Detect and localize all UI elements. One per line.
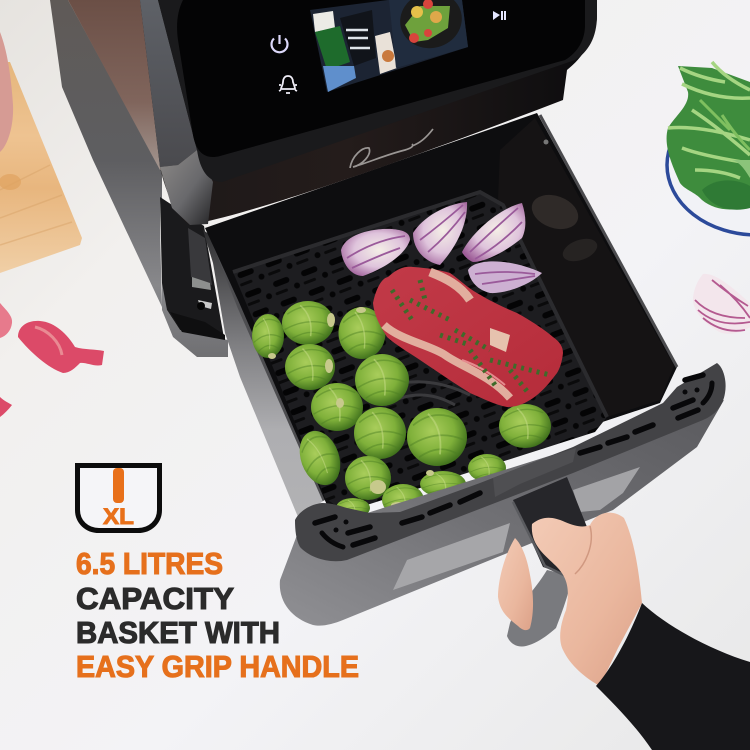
icon: power: [272, 35, 288, 52]
hand gripping the handle: [498, 513, 642, 686]
brussels sprouts: [252, 301, 551, 518]
air fryer side facet: [50, 0, 228, 357]
touch panel: [177, 0, 585, 157]
icon: XL basket capacity: [78, 466, 160, 530]
plate with green leaves: [667, 62, 750, 235]
sleeve: [596, 603, 750, 750]
touch panel frame: [158, 0, 597, 182]
basket right inner wall reflection: [498, 115, 677, 417]
headline text: [76, 547, 359, 684]
icon: light bulb: [279, 76, 297, 93]
red onion wedges in basket: [341, 202, 542, 293]
headline text: CAPACITY: [76, 582, 234, 616]
headline text: BASKET WITH: [76, 616, 280, 650]
brand signature logo: [350, 129, 433, 168]
crisper plate: [233, 192, 607, 512]
cook's hand at top left: [0, 32, 13, 152]
control head lower corner: [160, 150, 213, 225]
red onion peel petals: [0, 303, 104, 417]
sprout stems: [268, 307, 434, 508]
steak with herbs: [373, 267, 563, 407]
basket outer left wall: [203, 230, 325, 517]
icon: XL basket capacity: XL: [103, 504, 134, 529]
front panel window right: [573, 467, 640, 512]
headline text: 6.5 LITRES: [76, 547, 223, 581]
touch screen display: [310, 0, 468, 92]
basket front body: [280, 400, 724, 626]
side opening with basket rail: [160, 197, 225, 340]
icon: play pause: [493, 11, 506, 20]
control head grey strip: [140, 0, 197, 167]
air fryer brown reflective facet: [68, 0, 178, 170]
headline text: EASY GRIP HANDLE: [76, 650, 359, 684]
basket rim with vents: [295, 363, 726, 561]
basket interior: [205, 113, 677, 512]
loose onion wedge: [693, 274, 750, 334]
front panel window left: [393, 523, 510, 590]
basket handle: [507, 477, 587, 647]
cutting board: [0, 62, 82, 273]
control head housing: [140, 0, 597, 225]
